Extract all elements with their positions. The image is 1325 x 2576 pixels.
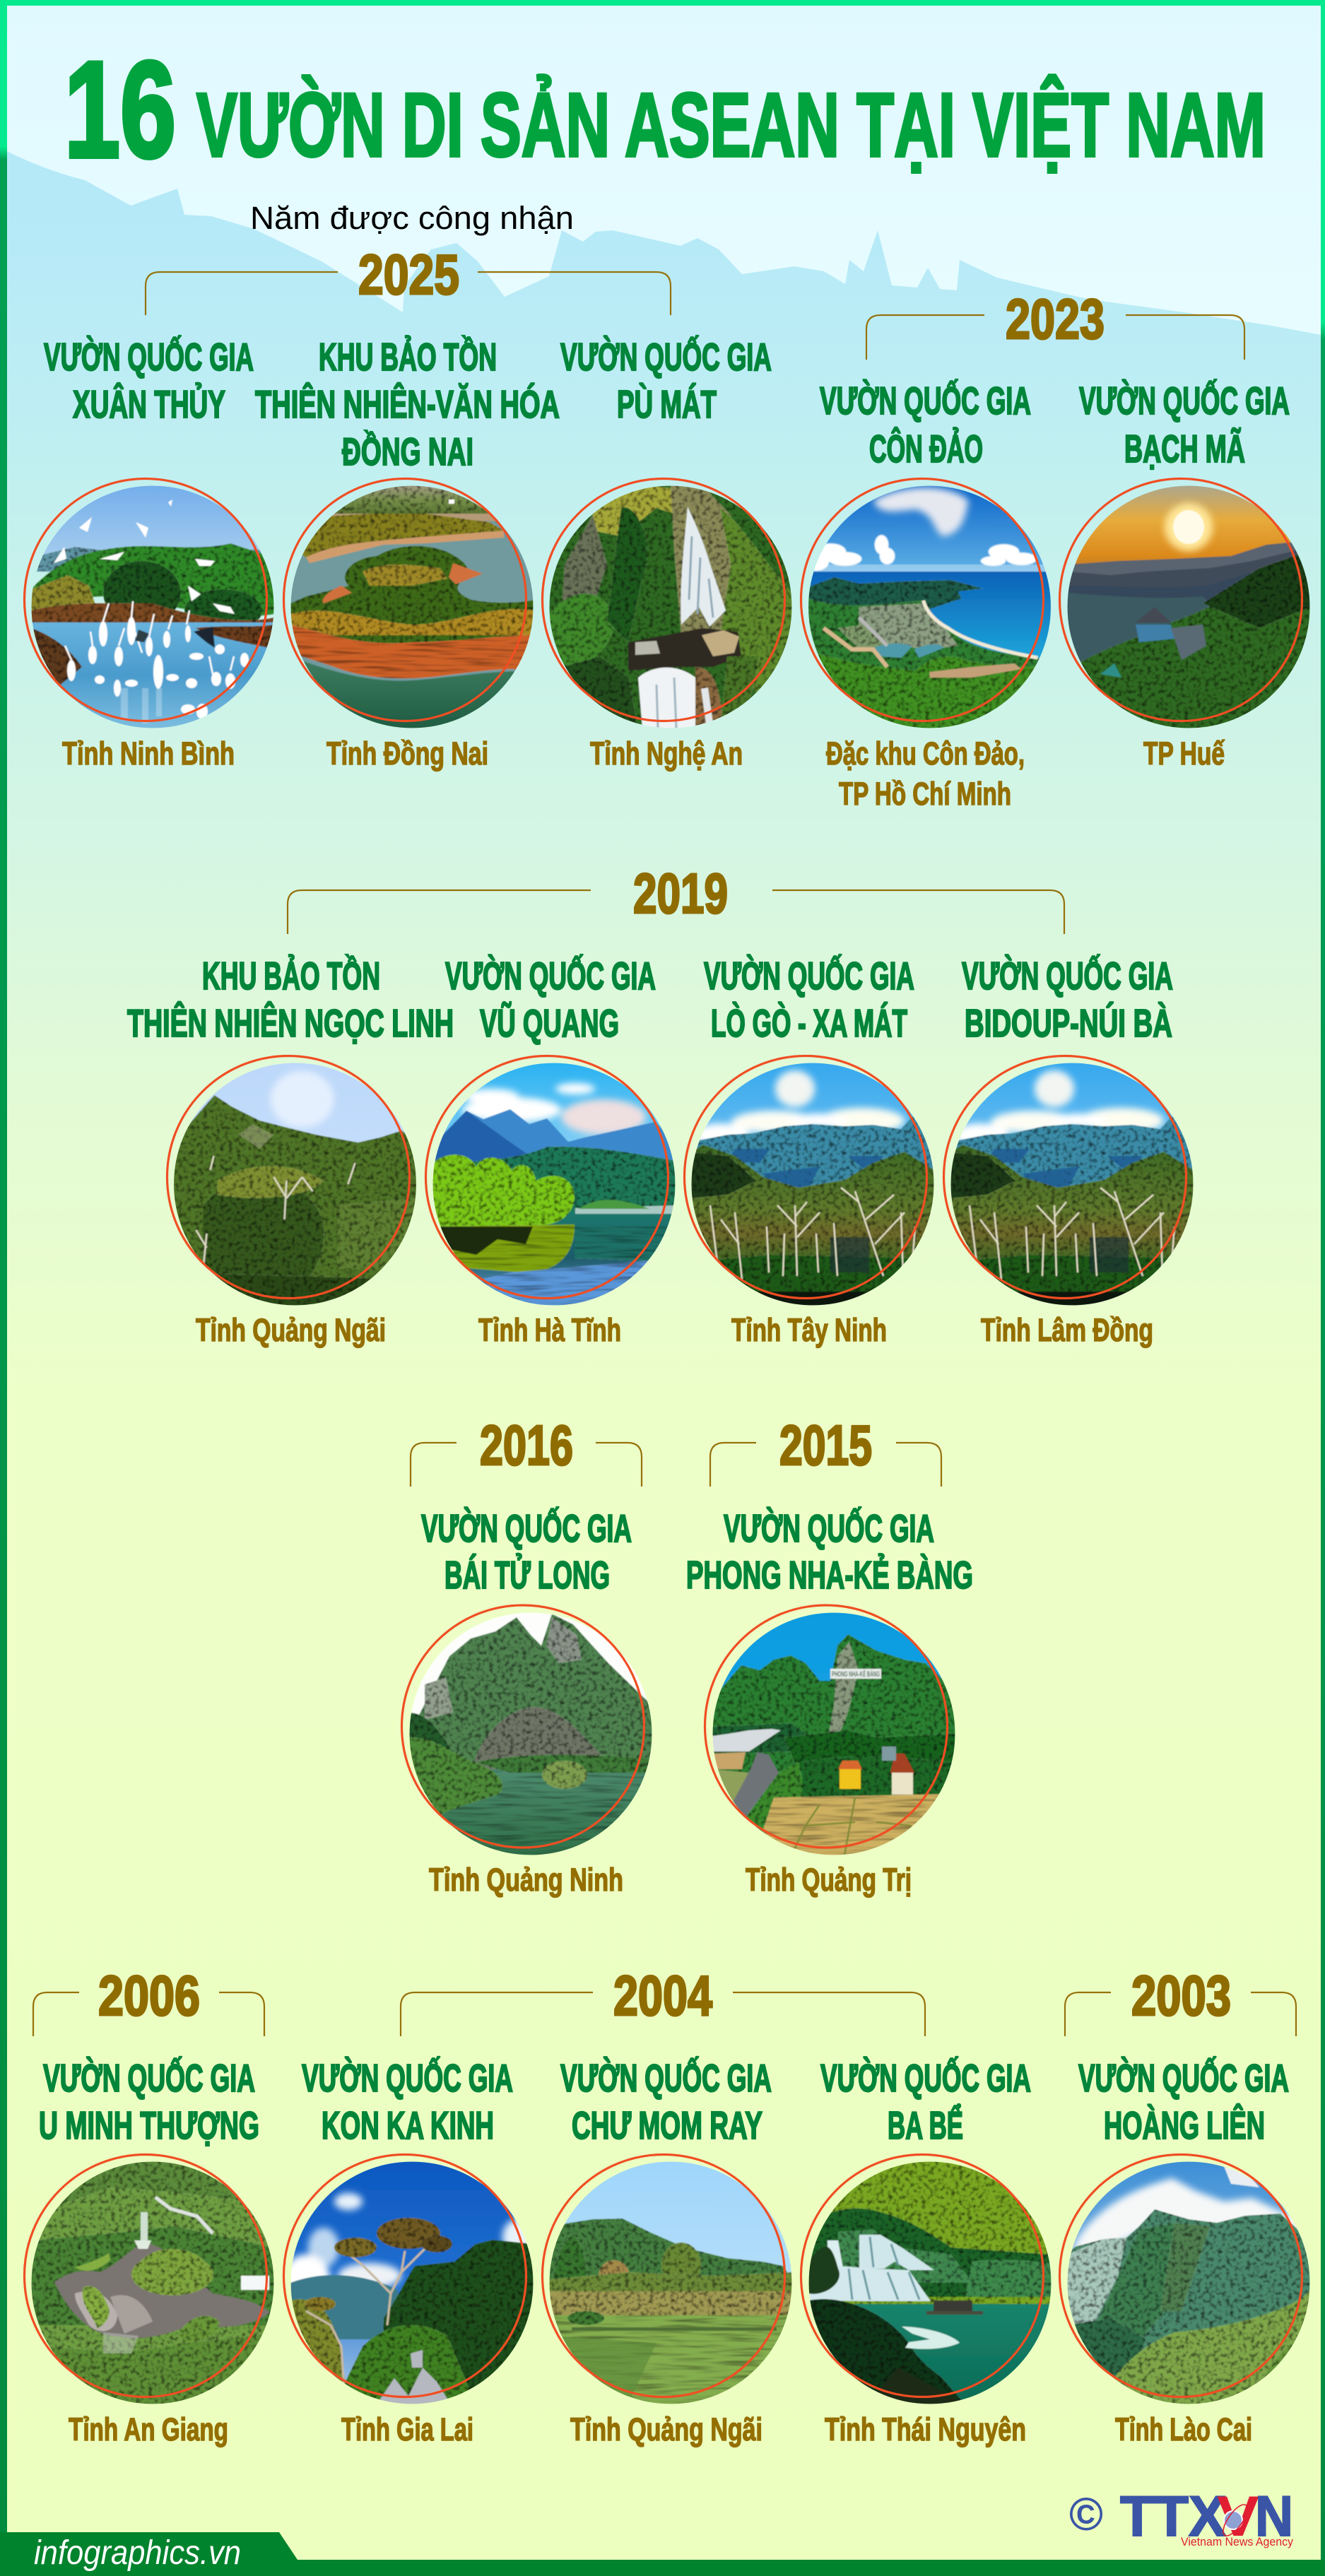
park: Ba Bể: [801, 2056, 1052, 2447]
agency logo: Vietnam News Agency: [1181, 2535, 1293, 2548]
photo: waterfall: [549, 485, 792, 728]
location: Tỉnh Ninh Bình: [62, 735, 235, 772]
year 2019 bracket: 2019: [633, 862, 728, 925]
agency logo: [1069, 2485, 1293, 2548]
park: Côn Đảo: [801, 379, 1052, 812]
park name: [39, 2056, 259, 2147]
location: Tỉnh Nghệ An: [590, 735, 743, 772]
park: Phong Nha-Kẻ Bàng: [686, 1506, 973, 1898]
park name: [820, 2056, 1031, 2147]
park: Vũ Quang: [425, 954, 676, 1348]
park name: VƯỜN QUỐC GIA: [962, 954, 1173, 998]
red ring: [1060, 2155, 1302, 2397]
park name: BÁI TỬ LONG: [444, 1553, 610, 1597]
location: Tỉnh An Giang: [69, 2411, 228, 2447]
park name: KHU BẢO TỒN: [202, 954, 380, 998]
park name: BẠCH MÃ: [1124, 427, 1245, 471]
park name: [1079, 379, 1290, 471]
location: Tỉnh Lâm Đồng: [981, 1312, 1153, 1348]
year 2019 bracket: [288, 862, 1064, 934]
park name: XUÂN THỦY: [73, 382, 225, 426]
park name: VƯỜN QUỐC GIA: [421, 1506, 632, 1550]
location: Tỉnh Quảng Ngãi: [570, 2411, 762, 2447]
red ring: [543, 479, 784, 721]
photo: mountain and village: PHONG NHA-KẺ BÀNG: [832, 1670, 880, 1679]
location: Đặc khu Côn Đảo,: [826, 735, 1025, 772]
agency logo: N: [1255, 2485, 1293, 2548]
photo: coastal bay: [804, 485, 1052, 728]
agency logo: TTX: [1120, 2485, 1226, 2548]
year 2015 bracket: 2015: [779, 1414, 872, 1477]
title: 16: [64, 33, 176, 187]
bottom band: [0, 2532, 1325, 2576]
park name: [560, 335, 772, 426]
red ring: [24, 2155, 267, 2397]
sky above mountain silhouette: [0, 0, 1325, 336]
location: Tỉnh Thái Nguyên: [825, 2411, 1026, 2447]
year 2016 bracket: 2016: [480, 1414, 573, 1477]
park name: CÔN ĐẢO: [869, 427, 983, 471]
location: TP Hồ Chí Minh: [839, 776, 1011, 812]
red ring: [284, 2155, 526, 2397]
photo: mountain and village: [712, 1612, 955, 1855]
park: Đồng Nai: [255, 335, 560, 772]
photo: lake island: [290, 485, 534, 728]
park name: VƯỜN QUỐC GIA: [43, 2056, 255, 2100]
park name: [820, 379, 1031, 471]
park name: VƯỜN QUỐC GIA: [820, 379, 1031, 423]
year 2006 bracket: 2006: [98, 1964, 200, 2027]
year 2006 bracket: [33, 1964, 264, 2036]
subtitle: year recognised: Năm được công nhận: [250, 200, 574, 236]
agency logo: ©: [1069, 2488, 1103, 2540]
photo: lake reflection: [432, 1063, 676, 1306]
photo: forest slope: [174, 1063, 417, 1306]
park name: [962, 954, 1173, 1045]
photo: birds on wetland: [31, 485, 274, 728]
park: Bái Tử Long: [401, 1506, 652, 1898]
park name: LÒ GÒ - XA MÁT: [711, 1001, 907, 1045]
red ring: [543, 2155, 784, 2397]
park name: VƯỜN QUỐC GIA: [302, 2056, 513, 2100]
location: Tỉnh Quảng Ngãi: [196, 1312, 386, 1348]
park name: BA BỂ: [888, 2103, 963, 2147]
park name: BIDOUP-NÚI BÀ: [965, 1001, 1172, 1045]
photo: wetland aerial: [31, 2161, 274, 2404]
park name: PHONG NHA-KẺ BÀNG: [686, 1553, 973, 1597]
red ring: [401, 1605, 644, 1848]
photo: pine forest: [691, 1063, 934, 1306]
red ring: [944, 1056, 1186, 1299]
park name: VƯỜN QUỐC GIA: [560, 2056, 772, 2100]
park name: VƯỜN QUỐC GIA: [445, 954, 656, 998]
agency logo: V: [1217, 2485, 1259, 2548]
park name: ĐỒNG NAI: [342, 430, 473, 473]
year 2025 bracket: [146, 243, 671, 315]
red ring: [1060, 479, 1302, 721]
park name: [560, 2056, 772, 2147]
park name: [1078, 2056, 1289, 2147]
park name: [686, 1506, 973, 1597]
park name: VƯỜN QUỐC GIA: [560, 335, 772, 379]
park: Chư Mom Ray: [543, 2056, 792, 2447]
photo: pine forest: [950, 1063, 1194, 1306]
year 2025 bracket: 2025: [358, 243, 459, 306]
year 2023 bracket: [866, 288, 1244, 360]
park name: [445, 954, 656, 1045]
park name: THIÊN NHIÊN NGỌC LINH: [127, 1001, 454, 1045]
park: Ngọc Linh: [127, 954, 454, 1348]
park name: U MINH THƯỢNG: [39, 2103, 259, 2147]
park: Bạch Mã: [1060, 379, 1310, 772]
park name: [127, 954, 454, 1045]
park name: KHU BẢO TỒN: [319, 335, 497, 379]
park: Pù Mát: [543, 335, 792, 772]
park name: VƯỜN QUỐC GIA: [704, 954, 914, 998]
location: Tỉnh Hà Tĩnh: [478, 1312, 621, 1348]
location: Tỉnh Quảng Ninh: [429, 1862, 623, 1898]
red ring: [284, 479, 526, 721]
year 2004 bracket: [401, 1964, 925, 2036]
year 2003 bracket: [1065, 1964, 1296, 2036]
year 2004 bracket: 2004: [613, 1964, 712, 2027]
park name: [421, 1506, 632, 1597]
park: U Minh Thượng: [24, 2056, 274, 2447]
park name: [255, 335, 560, 473]
park name: VŨ QUANG: [480, 1001, 619, 1045]
location: [826, 735, 1025, 812]
photo: tree and ridge: [281, 2161, 534, 2404]
red ring: [705, 1605, 947, 1848]
park: Hoàng Liên: [1060, 2056, 1310, 2447]
location: TP Huế: [1143, 735, 1225, 772]
photo: mountain and grassland: [549, 2161, 792, 2404]
red ring: [425, 1056, 669, 1299]
park name: CHƯ MOM RAY: [572, 2103, 762, 2147]
red ring: [167, 1056, 410, 1299]
location: Tỉnh Tây Ninh: [731, 1312, 887, 1348]
park: Lò Gò - Xa Mát: [684, 954, 934, 1348]
photo: mountain and clouds: [1067, 2161, 1310, 2404]
year 2023 bracket: 2023: [1006, 288, 1105, 350]
park name: PÙ MÁT: [617, 382, 717, 426]
photo: sunset mountain: [1067, 485, 1310, 728]
park name: KON KA KINH: [322, 2103, 494, 2147]
park name: [302, 2056, 513, 2147]
year 2003 bracket: 2003: [1131, 1964, 1231, 2027]
park name: [704, 954, 914, 1045]
park: Bidoup-Núi Bà: [944, 954, 1194, 1348]
website label: infographics.vn: [34, 2534, 241, 2572]
park name: VƯỜN QUỐC GIA: [44, 335, 254, 379]
red ring: [801, 2155, 1043, 2397]
park: Xuân Thủy: [24, 335, 274, 772]
year 2015 bracket: [710, 1414, 941, 1487]
park name: VƯỜN QUỐC GIA: [724, 1506, 934, 1550]
park name: THIÊN NHIÊN-VĂN HÓA: [255, 382, 560, 426]
year 2016 bracket: [411, 1414, 642, 1487]
photo: waterfall and lake: [808, 2161, 1052, 2404]
park name: [44, 335, 254, 426]
location: Tỉnh Đồng Nai: [326, 735, 488, 772]
red ring: [684, 1056, 927, 1299]
red ring: [24, 479, 267, 721]
park name: VƯỜN QUỐC GIA: [820, 2056, 1031, 2100]
photo: karst and mangrove: [409, 1612, 652, 1855]
location: Tỉnh Quảng Trị: [746, 1862, 912, 1898]
title: [64, 33, 1266, 187]
park: Kon Ka Kinh: [281, 2056, 534, 2447]
red ring: [801, 479, 1043, 721]
location: Tỉnh Gia Lai: [341, 2411, 473, 2447]
location: Tỉnh Lào Cai: [1115, 2411, 1252, 2447]
